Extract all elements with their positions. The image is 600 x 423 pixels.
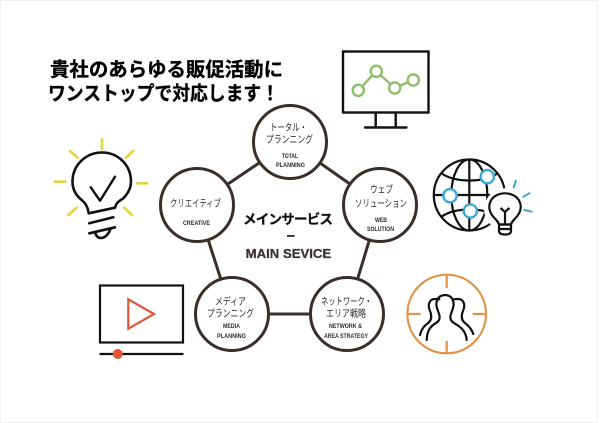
circle: web solution: SOLUTION [367,226,394,233]
circle: media planning: プランニング [207,307,254,320]
circle: media planning: MEDIA [223,323,240,330]
title [48,59,283,105]
circle: media planning: メディア [215,295,246,308]
circle: network and area strategy: NETWORK & [329,323,362,330]
title: 貴社のあらゆる販促活動に [50,59,283,81]
center label: MAIN SEVICE [246,247,331,261]
circle: network and area strategy: エリア戦略 [326,307,366,320]
center label: メインサービス [243,211,333,227]
circle: web solution: ウェブ [370,183,393,196]
circle: network and area strategy: AREA STRATEGY [324,333,369,340]
center label [243,211,333,261]
circle: total planning: プランニング [266,133,313,146]
circle: web solution [344,168,416,242]
icon: globe with light bulb [434,160,532,234]
icon: light bulb with check mark [55,140,147,238]
icon: monitor with line chart [343,52,428,128]
circle: total planning: TOTAL [282,153,298,160]
circle: total planning [254,106,326,178]
circle: media planning [196,278,268,350]
circle: network and area strategy: ネットワーク・ [321,296,372,308]
icon: video player [100,286,184,359]
diagram: main service pentagon [160,106,416,350]
circle: creative [160,168,234,242]
circle: media planning: PLANNING [217,333,246,340]
circle: total planning: PLANNING [276,162,305,169]
icon: target with people [407,275,486,354]
circle: network and area strategy [310,278,384,350]
circle: web solution: ソリューション [355,199,407,210]
circle: creative: クリエイティブ [170,197,221,210]
circle: total planning: トータル・ [270,122,307,134]
title: ワンストップで対応します！ [48,83,279,105]
circle: creative: CREATIVE [183,220,211,227]
circle: web solution: WEB [375,217,387,224]
